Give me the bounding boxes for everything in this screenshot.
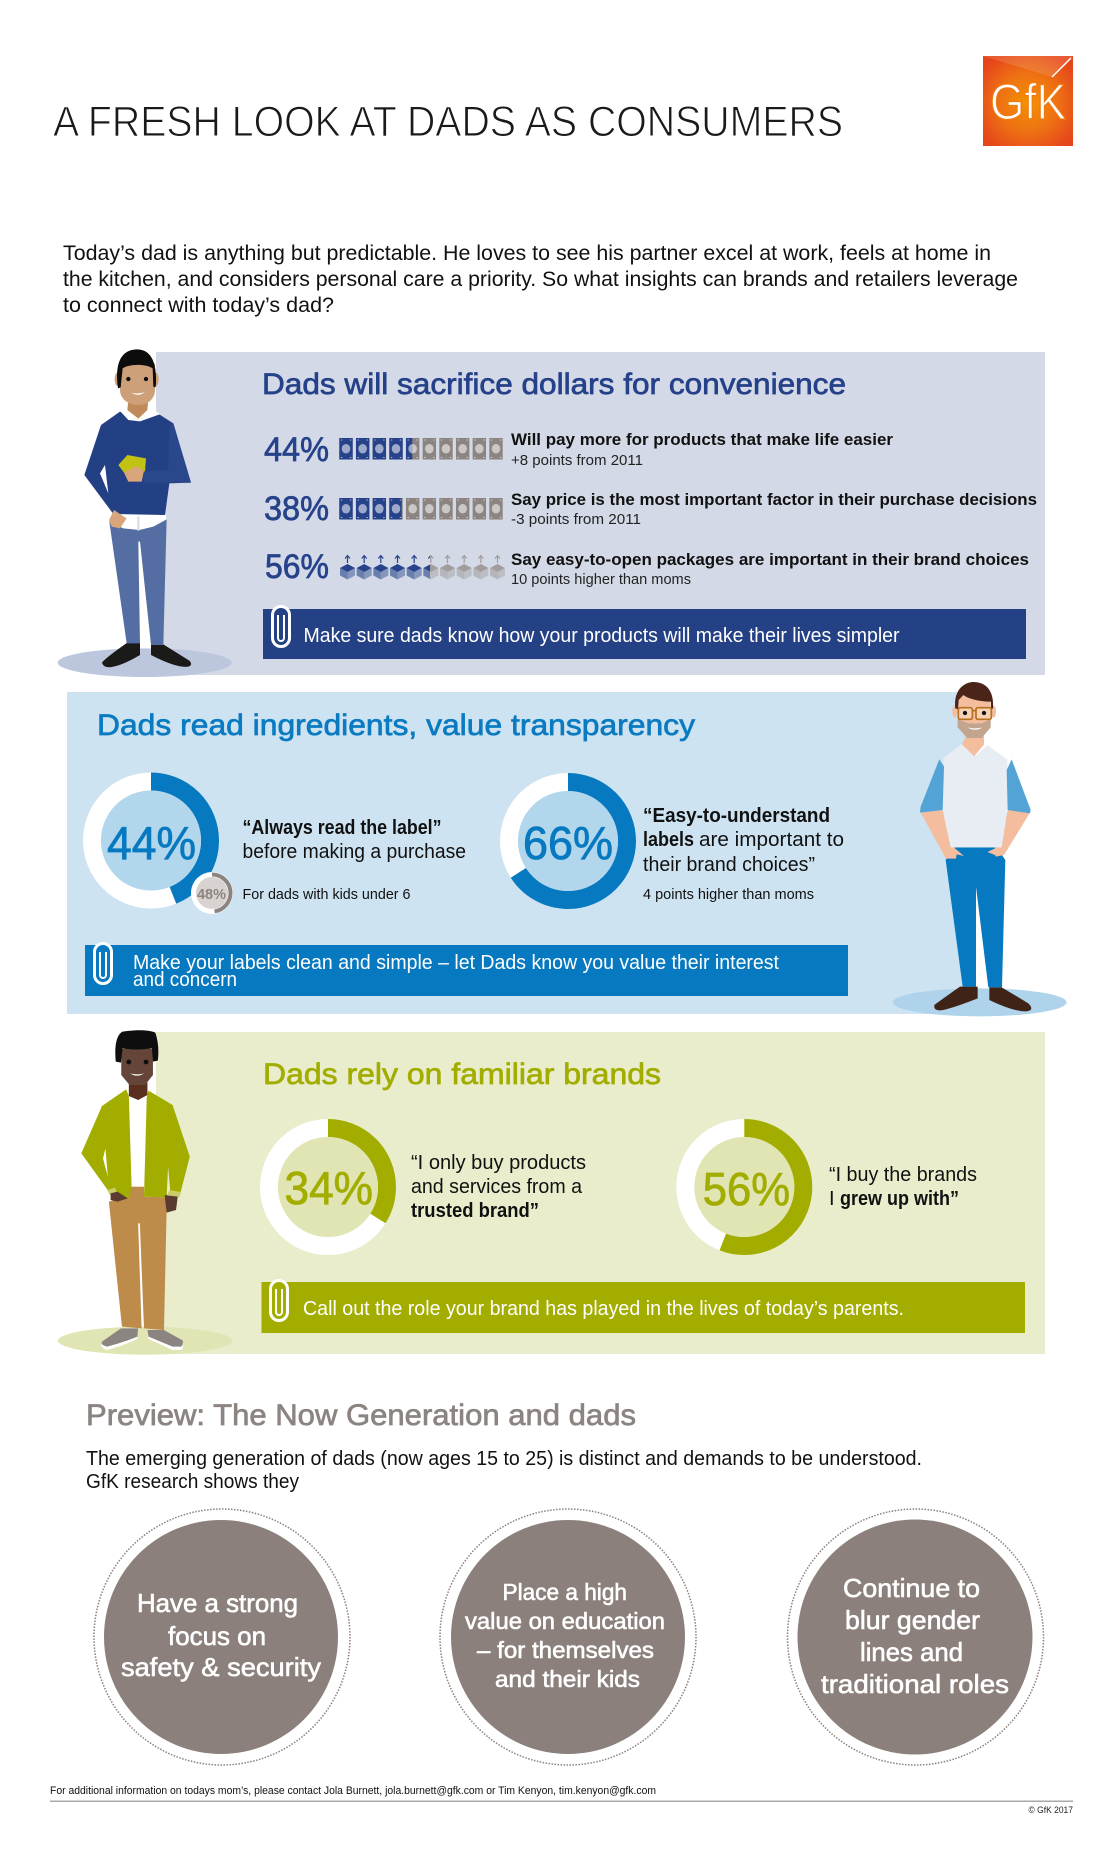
circle: blur gender lines: traditional roles <box>821 1669 1009 1699</box>
circle: blur gender lines <box>788 1509 1044 1765</box>
circle: value on education: – for themselves <box>477 1637 654 1663</box>
text: trusted brand: “I only buy products <box>411 1152 586 1174</box>
icon: paperclip <box>272 607 290 646</box>
stat row: 56% packages: Say easy-to-open packages are important in their brand choices <box>511 551 1029 569</box>
circle: blur gender lines: blur gender <box>845 1605 980 1635</box>
heading: ingredients: Dads read ingredients, value transparency <box>97 709 695 742</box>
text: grew up with: grew up with” <box>840 1188 959 1210</box>
circle: safety and security: safety & security <box>121 1652 321 1682</box>
text: grew up with: I <box>829 1188 835 1210</box>
circle: value on education <box>440 1509 696 1765</box>
circle: safety and security <box>94 1509 350 1765</box>
callout: simpler: Make sure dads know how your products will make their lives simpler <box>304 625 900 647</box>
circle: blur gender lines: lines and <box>860 1637 963 1667</box>
text: easy to understand labels: their brand choices” <box>643 854 815 876</box>
heading: familiar brands: Dads rely on familiar brands <box>263 1058 661 1091</box>
panel: ingredients <box>67 692 975 1014</box>
stat row: 56% packages: 56% <box>265 548 329 586</box>
donut: 44%: 44% <box>107 817 196 869</box>
logo: GfK <box>983 56 1073 146</box>
panel: familiar brands <box>156 1032 1045 1354</box>
donut: 34%: 34% <box>284 1162 373 1214</box>
text: easy to understand labels: “Easy-to-understand <box>643 805 830 827</box>
stat row: 44% pay more: +8 points from 2011 <box>511 453 643 469</box>
donut: 66% <box>509 782 627 900</box>
footer contact line: For additional information on todays mom’s, please contact Jola Burnett, jola.burnett@gfk.com or Tim Kenyon, tim.kenyon@gfk.com <box>50 1785 656 1797</box>
text: always read the label: before making a purchase <box>242 841 466 863</box>
text: preview intro: GfK research shows they <box>86 1471 299 1493</box>
text: preview intro: The emerging generation of dads (now ages 15 to 25) is distinct and demands to be understood. <box>86 1448 922 1470</box>
text: grew up with <box>829 1164 977 1210</box>
donut: 66%: 66% <box>523 817 613 869</box>
intro text: to connect with today’s dad? <box>63 294 334 317</box>
text: grew up with: “I buy the brands <box>829 1164 977 1186</box>
intro text <box>63 242 1018 317</box>
intro text: the kitchen, and considers personal care a priority. So what insights can brands and retailers leverage <box>63 268 1018 291</box>
copyright: © GfK 2017 <box>1028 1805 1073 1815</box>
heading: preview: Preview: The Now Generation and dads <box>86 1399 636 1432</box>
text: always read the label: For dads with kids under 6 <box>242 886 410 903</box>
intro text: Today’s dad is anything but predictable. He loves to see his partner excel at work, feels at home in <box>63 242 991 265</box>
icon: paperclip <box>94 944 112 983</box>
text: trusted brand <box>411 1152 586 1222</box>
text: easy to understand labels: 4 points higher than moms <box>643 886 814 903</box>
donut: 48% small: 48% <box>197 886 226 903</box>
logo: GfK: GfK <box>990 74 1066 130</box>
callout: role of brand <box>262 1282 1025 1333</box>
heading: convenience: Dads will sacrifice dollars for convenience <box>262 368 846 401</box>
stat row: 44% pay more: 44% <box>264 431 329 469</box>
figure: dad with glasses <box>893 682 1067 1016</box>
text: trusted brand: trusted brand” <box>411 1200 539 1222</box>
circle: value on education: and their kids <box>495 1666 640 1692</box>
donut: 44% <box>92 782 210 900</box>
text: easy to understand labels: labels <box>643 829 694 851</box>
text: preview intro <box>86 1448 922 1493</box>
circle: value on education: value on education <box>465 1608 665 1634</box>
figure: dad with money <box>58 349 232 677</box>
circle: safety and security: Have a strong <box>137 1588 298 1618</box>
callout: role of brand: Call out the role your brand has played in the lives of today’s parents. <box>303 1298 904 1320</box>
callout: simpler <box>263 609 1026 659</box>
donut: 34% <box>269 1128 387 1246</box>
panel: convenience <box>156 352 1045 675</box>
donut: 48% small <box>191 872 233 914</box>
donut: 56%: 56% <box>703 1163 790 1215</box>
stat row: 44% pay more: Will pay more for products that make life easier <box>511 431 894 449</box>
stat row: 38% price: -3 points from 2011 <box>511 512 641 528</box>
text: easy to understand labels <box>643 805 844 903</box>
callout: clean labels <box>85 945 848 996</box>
figure: dad in green jacket <box>58 1030 232 1355</box>
circle: value on education: Place a high <box>502 1579 627 1605</box>
title: A FRESH LOOK AT DADS AS CONSUMERS <box>53 98 843 146</box>
stat row: 56% packages <box>266 553 1028 587</box>
circle: blur gender lines: Continue to <box>843 1573 980 1603</box>
stat row: 38% price: 38% <box>264 490 329 528</box>
callout: clean labels: Make your labels clean and simple – let Dads know you value their interest <box>133 952 779 974</box>
icon: paperclip <box>270 1281 288 1320</box>
stat row: 38% price: Say price is the most important factor in their purchase decisions <box>511 491 1037 509</box>
callout: clean labels: and concern <box>133 969 237 991</box>
stat row: 38% price <box>264 493 1036 527</box>
section: now generation preview <box>86 1399 1044 1765</box>
text: always read the label: “Always read the label” <box>242 817 442 839</box>
text: easy to understand labels: are important to <box>699 829 844 851</box>
text: always read the label <box>242 817 466 903</box>
donut: 56% <box>685 1128 803 1246</box>
text: trusted brand: and services from a <box>411 1176 583 1198</box>
stat row: 56% packages: 10 points higher than moms <box>511 572 691 588</box>
circle: safety and security: focus on <box>168 1621 266 1651</box>
stat row: 44% pay more <box>264 431 894 469</box>
